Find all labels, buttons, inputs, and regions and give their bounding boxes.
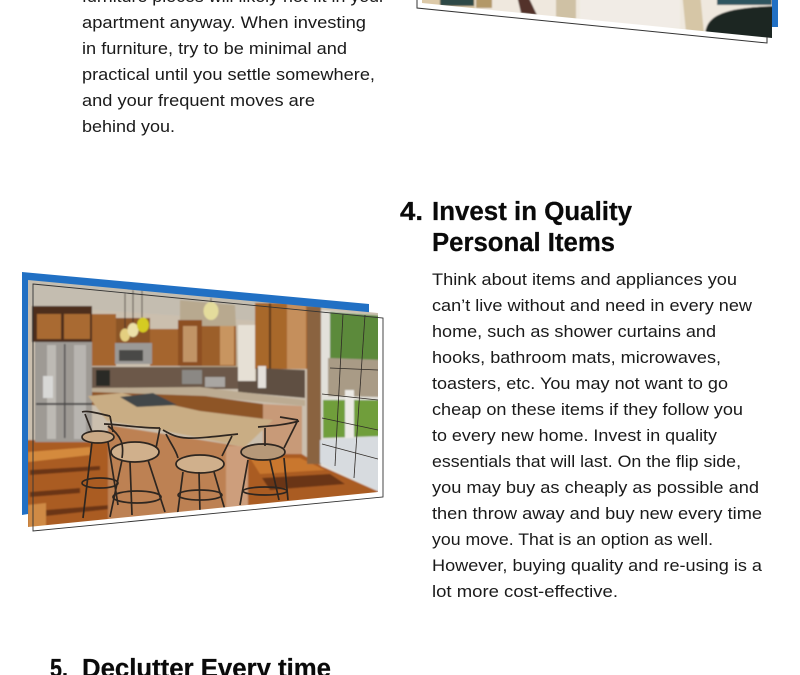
text block: quality essentials advice: Think about items and appliances you bbox=[432, 270, 737, 289]
text block: quality essentials advice: you may buy as cheaply as possible and bbox=[432, 478, 759, 497]
text block: quality essentials advice: home, such as shower curtains and bbox=[432, 322, 716, 341]
text block: quality essentials advice: to every new home. Invest in quality bbox=[432, 426, 718, 445]
text block: furniture advice: practical until you settle somewhere, bbox=[82, 65, 375, 84]
text block: quality essentials advice: you move. That is an option as well. bbox=[432, 530, 713, 549]
heading: Invest in Quality Personal Items bbox=[432, 198, 633, 257]
text block: quality essentials advice: lot more cost-effective. bbox=[432, 582, 618, 601]
door bbox=[307, 306, 321, 464]
text block: quality essentials advice: hooks, bathroom mats, microwaves, bbox=[432, 348, 721, 367]
text block: furniture advice: and your frequent moves are bbox=[82, 91, 315, 110]
text block: quality essentials advice: However, buying quality and re-using is a bbox=[432, 556, 763, 575]
fridge bbox=[35, 342, 92, 442]
outline frame bbox=[33, 284, 383, 531]
text block: quality essentials advice: essentials that will last. On the flip side, bbox=[432, 452, 741, 471]
text block: furniture advice: behind you. bbox=[82, 117, 175, 136]
floor bbox=[28, 439, 378, 527]
backsplash and counter bbox=[92, 367, 238, 389]
heading number: 4: 4. bbox=[400, 198, 423, 226]
microwave bbox=[115, 343, 152, 364]
pendant lights bbox=[125, 290, 211, 330]
text block: furniture advice: apartment anyway. When investing bbox=[82, 13, 366, 32]
blue accent shape bbox=[22, 272, 369, 515]
photo: living room with frame bbox=[415, 0, 780, 44]
text block: quality essentials advice: toasters, etc. You may not want to go bbox=[432, 374, 728, 393]
photo: kitchen with blue accent and outline frame bbox=[20, 270, 384, 535]
island bbox=[108, 425, 245, 520]
bar stools bbox=[82, 411, 299, 518]
text block: furniture advice bbox=[82, 0, 385, 136]
text block: quality essentials advice: cheap on these items if they follow you bbox=[432, 400, 743, 419]
heading: Invest in Quality Personal Items: Personal Items bbox=[432, 229, 615, 257]
text block: quality essentials advice: can’t live without and need in every new bbox=[432, 296, 753, 315]
text block: quality essentials advice: then throw away and buy new every time bbox=[432, 504, 762, 523]
heading: Invest in Quality Personal Items: Invest in Quality bbox=[432, 198, 633, 226]
text block: quality essentials advice bbox=[432, 270, 763, 601]
text block: furniture advice: in furniture, try to be minimal and bbox=[82, 39, 347, 58]
upper cabinets bbox=[32, 306, 92, 342]
kitchen image bbox=[28, 280, 378, 527]
